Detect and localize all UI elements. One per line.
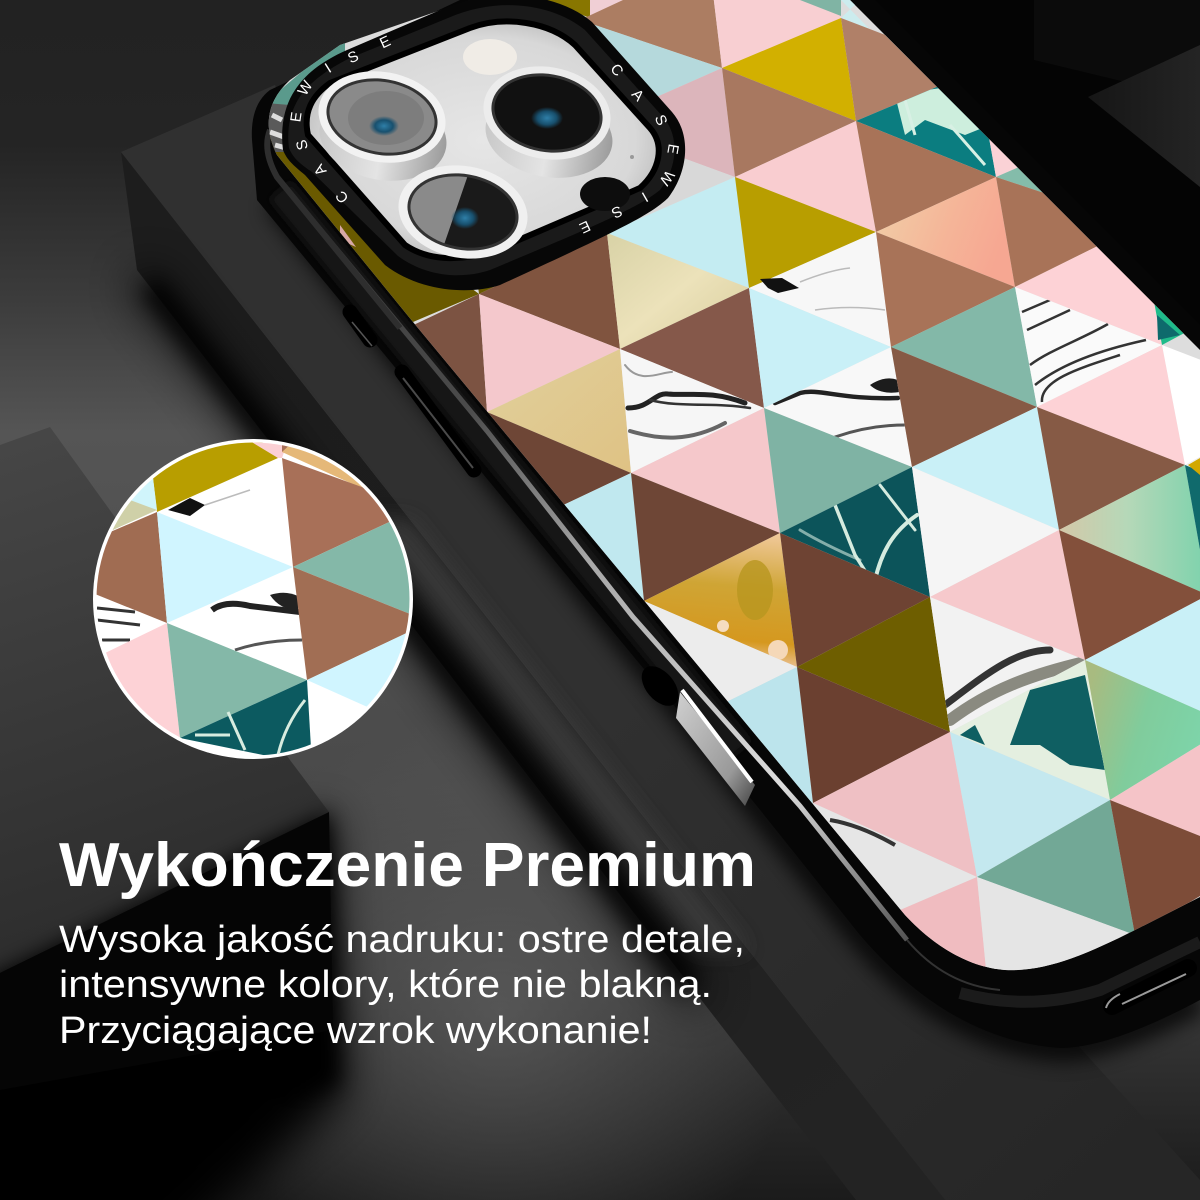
ring lettering: left CASEWISE: E (377, 33, 393, 52)
ring lettering: right CASEWISE (577, 61, 682, 236)
ring lettering: right CASEWISE: I (639, 188, 651, 205)
camera glass window (307, 22, 659, 258)
ring lettering: left CASEWISE: E (287, 111, 306, 123)
ring lettering: right CASEWISE: C (607, 61, 627, 80)
ring lettering: right CASEWISE: A (628, 86, 647, 105)
heading: Wykończenie Premium (59, 831, 756, 900)
ring lettering: left CASEWISE: A (311, 161, 330, 179)
sensor hole (580, 155, 634, 211)
lens: upper left (311, 62, 453, 190)
ring lettering: right CASEWISE: S (609, 202, 625, 221)
side buttons (350, 312, 1188, 1008)
ring lettering: left CASEWISE: C (332, 187, 352, 206)
phone case body (252, 0, 1200, 1048)
lens: upper right (476, 57, 619, 187)
ring lettering: left CASEWISE: I (322, 60, 335, 77)
ring lettering: right CASEWISE: E (663, 143, 682, 155)
body text: Wysoka jakość nadruku: ostre detale, (59, 919, 745, 961)
camera module ring (282, 0, 685, 290)
lens: bottom split (398, 166, 528, 259)
flash (463, 39, 517, 75)
ring lettering: left CASEWISE: W (294, 77, 317, 99)
ring lettering: left CASEWISE: S (293, 138, 312, 152)
ring lettering: right CASEWISE: E (577, 217, 593, 236)
printed triangle pattern (250, 0, 1200, 1010)
ring lettering: left CASEWISE: S (345, 48, 361, 67)
body text (59, 919, 745, 1052)
ring lettering: right CASEWISE: W (655, 167, 678, 189)
magnified detail circle (93, 439, 413, 759)
body text: intensywne kolory, które nie blakną. (59, 964, 712, 1006)
body text: Przyciągające wzrok wykonanie! (59, 1010, 652, 1052)
ring lettering: right CASEWISE: S (651, 112, 670, 128)
ring lettering: left CASEWISE (287, 33, 393, 206)
